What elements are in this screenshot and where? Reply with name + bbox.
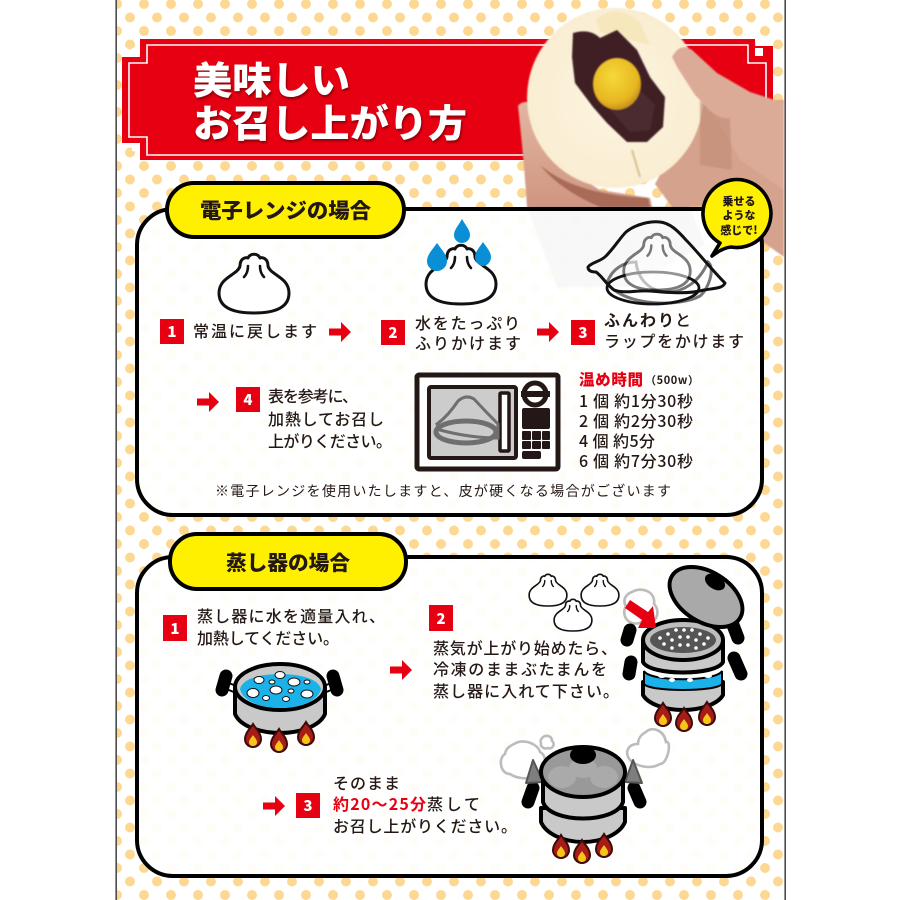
step 1 (163, 603, 385, 649)
heading pill: microwave (167, 183, 404, 237)
step 3 (296, 770, 517, 837)
step 2: 蒸気が上がり始めたら、 (433, 635, 617, 659)
title text: 美味しい (193, 50, 350, 105)
step 2: 水をたっぷり (415, 310, 520, 334)
step 3: 蒸して (427, 791, 480, 815)
speech bubble (703, 180, 771, 256)
step 4: 4 (243, 389, 253, 410)
step 2: 2 (436, 608, 446, 629)
heating time table: 温め時間 (579, 368, 643, 390)
step 1: 常温に戻します (193, 318, 317, 342)
heating time table (579, 368, 699, 472)
step 3: 約20〜25分 (333, 791, 426, 815)
icon: three buns (529, 574, 619, 631)
icon: bun with water drops (426, 219, 496, 304)
panel: steamer (137, 534, 762, 876)
arrow (390, 660, 412, 680)
step 4: 加熱してお召し (268, 406, 384, 430)
title text: お召し上がり方 (193, 93, 467, 148)
panel: microwave (137, 183, 762, 515)
icon: bun with wrap (588, 222, 725, 304)
step 2: ふりかけます (415, 330, 521, 354)
title banner (122, 39, 773, 160)
step 3 (571, 307, 744, 352)
photo: hands holding chestnut bun (518, 8, 784, 287)
step 1: 1 (167, 321, 177, 342)
arrow (329, 322, 351, 342)
speech bubble: 乗せる (722, 193, 756, 209)
step 2: 冷凍のままぶたまんを (433, 656, 607, 680)
heading pill: steamer: 蒸し器の場合 (226, 546, 351, 576)
heating time table: （500w） (645, 372, 699, 388)
icon: steaming steamer (501, 729, 669, 863)
step 3: 3 (578, 322, 588, 343)
step 1: 加熱してください。 (197, 625, 339, 649)
step 3: ふんわり (604, 307, 674, 331)
step 2: 2 (388, 322, 398, 343)
heating time table: 4 個 約5分 (579, 428, 655, 452)
speech bubble: ような (722, 207, 756, 223)
step 4 (236, 383, 392, 452)
step 3: お召し上がりください。 (333, 813, 517, 837)
heading pill: microwave: 電子レンジの場合 (200, 195, 371, 225)
step 4: 上がりください。 (268, 428, 392, 452)
heating time table: 6 個 約7分30秒 (579, 448, 693, 472)
icon: open steamer (624, 555, 753, 731)
heading pill: steamer (170, 534, 406, 589)
arrow (197, 392, 219, 412)
icon: boiling pot (222, 664, 338, 752)
step 2 (381, 310, 521, 354)
step 4: 表を参考に、 (268, 383, 358, 407)
step 2: 蒸し器に入れて下さい。 (433, 678, 619, 702)
heating time table: 2 個 約2分30秒 (579, 408, 693, 432)
step 3: ラップをかけます (604, 328, 744, 352)
step 3: 3 (303, 795, 313, 816)
speech bubble: 感じで! (720, 222, 758, 238)
arrow (263, 796, 285, 816)
icon: microwave (417, 375, 558, 469)
step 1: 蒸し器に水を適量入れ、 (197, 603, 385, 627)
step 2 (429, 605, 619, 702)
icon: bun (219, 254, 289, 313)
step 3: と (675, 307, 691, 331)
heating time table: 1 個 約1分30秒 (579, 388, 693, 412)
note: ※電子レンジを使用いたしますと、皮が硬くなる場合がございます (215, 481, 671, 501)
arrow (537, 322, 559, 342)
step 3: そのまま (333, 770, 400, 794)
title text (193, 50, 467, 148)
step 1: 1 (170, 618, 180, 639)
page background with dots (116, 0, 786, 900)
